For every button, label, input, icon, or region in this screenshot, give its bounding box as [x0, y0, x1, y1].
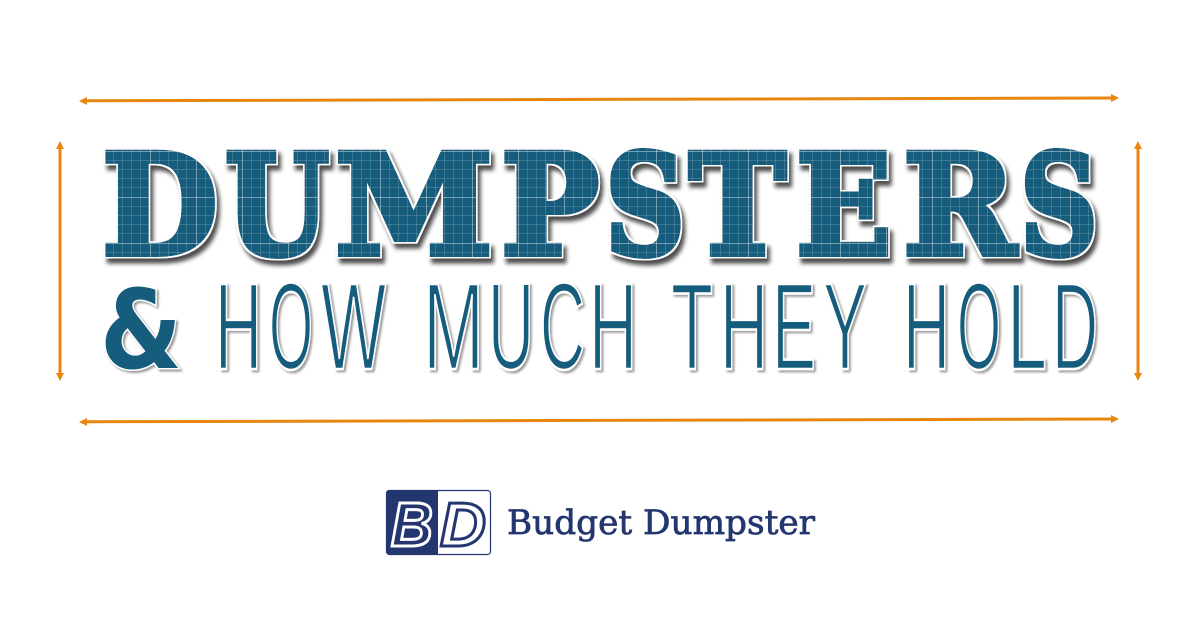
logo mark: BD badge — [386, 490, 490, 560]
subtitle: HOW MUCH THEY HOLD: H — [903, 259, 950, 396]
arrow: left vertical — [56, 141, 64, 381]
logo: Budget Dumpster — [386, 490, 816, 560]
arrow: right vertical — [1134, 141, 1142, 381]
arrow: top horizontal — [79, 94, 1119, 105]
subtitle: HOW MUCH THEY HOLD: Y — [823, 259, 867, 396]
subtitle: HOW MUCH THEY HOLD: D — [1052, 259, 1098, 396]
subtitle: HOW MUCH THEY HOLD: W — [321, 259, 386, 396]
title: DUMPSTERS: S — [605, 123, 685, 287]
logo mark: BD badge: B — [391, 491, 433, 560]
subtitle: HOW MUCH THEY HOLD: T — [671, 259, 713, 396]
subtitle: HOW MUCH THEY HOLD: M — [423, 259, 484, 396]
subtitle: HOW MUCH THEY HOLD: C — [540, 259, 585, 396]
title: DUMPSTERS: R — [903, 123, 1017, 287]
subtitle: HOW MUCH THEY HOLD: H — [720, 259, 768, 396]
title: DUMPSTERS: P — [501, 123, 599, 287]
subtitle: HOW MUCH THEY HOLD: H — [589, 259, 637, 396]
logo mark: BD badge: D — [440, 491, 486, 560]
logo wordmark: Budget Dumpster — [507, 503, 816, 543]
arrow: bottom horizontal — [79, 415, 1119, 426]
title: DUMPSTERS: S — [1020, 123, 1098, 287]
title: DUMPSTERS: E — [796, 123, 892, 287]
subtitle: HOW MUCH THEY HOLD: O — [957, 259, 1001, 396]
subtitle: HOW MUCH THEY HOLD: L — [1007, 259, 1047, 396]
title: DUMPSTERS: U — [225, 123, 329, 287]
subtitle: HOW MUCH THEY HOLD: H — [215, 259, 262, 396]
title: DUMPSTERS: T — [689, 123, 786, 287]
title: DUMPSTERS: D — [102, 123, 218, 287]
subtitle: HOW MUCH THEY HOLD: O — [269, 259, 313, 396]
subtitle: HOW MUCH THEY HOLD: U — [488, 259, 534, 396]
title: DUMPSTERS: M — [335, 123, 493, 287]
subtitle: HOW MUCH THEY HOLD: E — [772, 259, 816, 396]
ampersand: & — [100, 266, 182, 394]
